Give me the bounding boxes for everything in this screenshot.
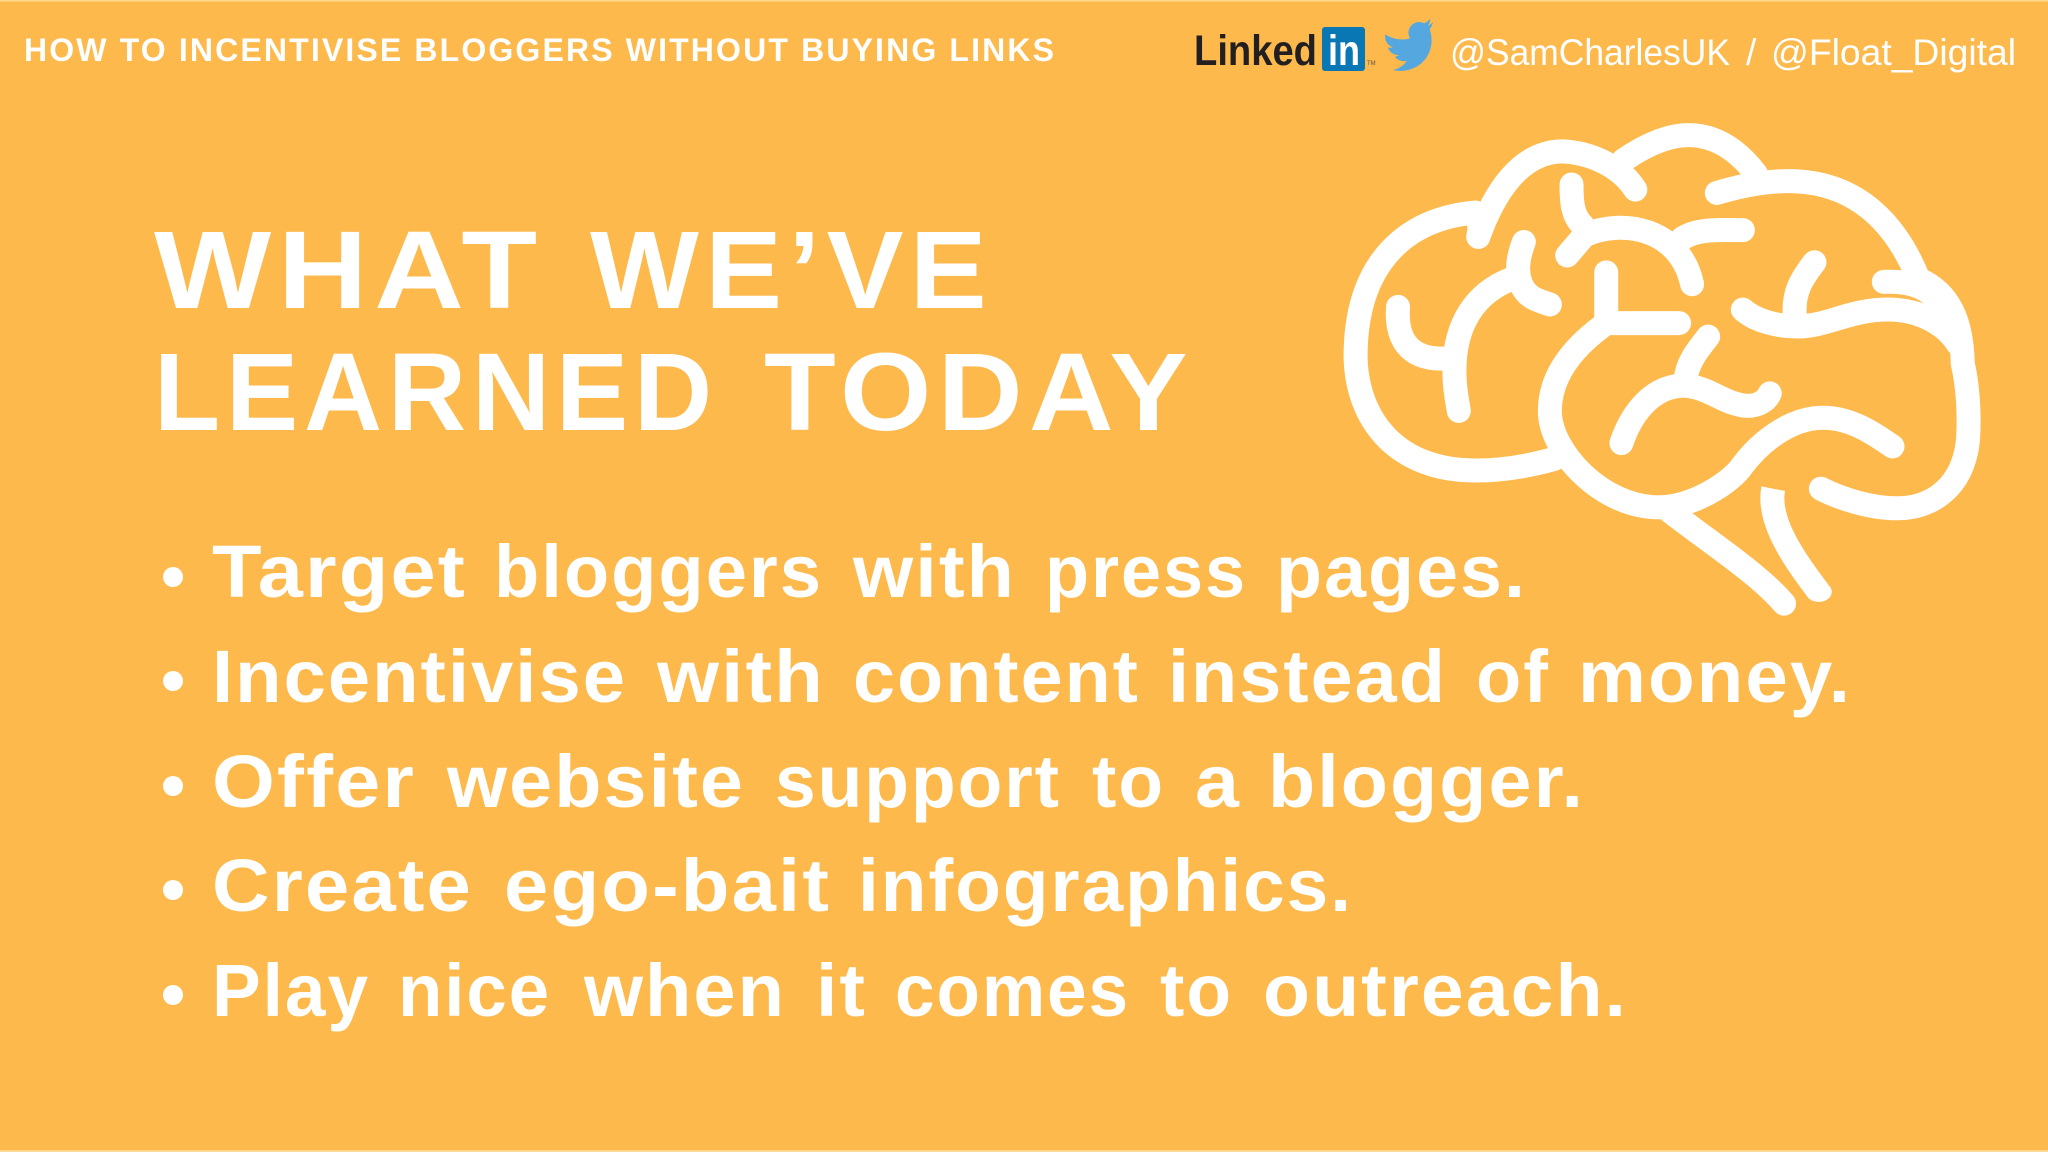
bullet 4 [163,844,1353,927]
icon: LinkedIn logo: in [1328,27,1360,75]
bullet 2 [163,635,1852,718]
bullet 2: with [656,635,825,718]
bullet 2: instead [1168,635,1447,718]
bullet 3: blogger. [1268,740,1585,823]
bullet 3: to [1092,740,1165,823]
bullet 5: nice [398,949,551,1032]
heading: TODAY [764,331,1194,454]
social handles: / [1746,32,1757,73]
bullet 3: Offer [212,740,416,823]
bullet 5: it [816,949,867,1032]
bullet 5 [163,949,1628,1032]
bullet 1: press [1045,530,1247,613]
bullet 5: outreach. [1263,949,1628,1032]
bullet 2: money. [1578,635,1852,718]
icon: brain outline [1356,135,1969,604]
bullet 1: Target [212,530,467,613]
bullet 2: content [853,635,1140,718]
bullet 1: with [852,530,1016,613]
bullet 4: ego-bait [504,844,831,927]
bullet 2: of [1476,635,1550,718]
bullet 3: a [1195,740,1241,823]
bullet 3 [163,740,1585,823]
heading [154,209,1194,454]
bullet 5: Play [212,949,370,1032]
bullet list [163,530,1852,1032]
bullet 4: infographics. [858,844,1353,927]
heading: WHAT [154,209,544,332]
bullet 2: Incentivise [212,635,627,718]
bullet 3: support [775,740,1061,823]
social handles [1450,32,2016,73]
bullet 5: comes [895,949,1130,1032]
heading: WE’VE [590,209,993,332]
social handles: @Float_Digital [1771,32,2016,73]
bullet 1: bloggers [494,530,823,613]
bullet 1: pages. [1276,530,1527,613]
heading: LEARNED [154,331,718,454]
bullet 3: website [446,740,745,823]
header: presentation title: HOW TO INCENTIVISE BLOGGERS WITHOUT BUYING LINKS [24,32,1054,68]
icon: LinkedIn logo: TM [1367,61,1376,67]
bullet 4: Create [212,844,473,927]
bullet 5: when [583,949,786,1032]
icon: Twitter bird [1381,17,1445,75]
bullet 5: to [1160,949,1233,1032]
social handles: @SamCharlesUK [1450,32,1730,73]
icon: LinkedIn logo: Linked [1194,27,1317,75]
bullet 1 [163,530,1527,613]
